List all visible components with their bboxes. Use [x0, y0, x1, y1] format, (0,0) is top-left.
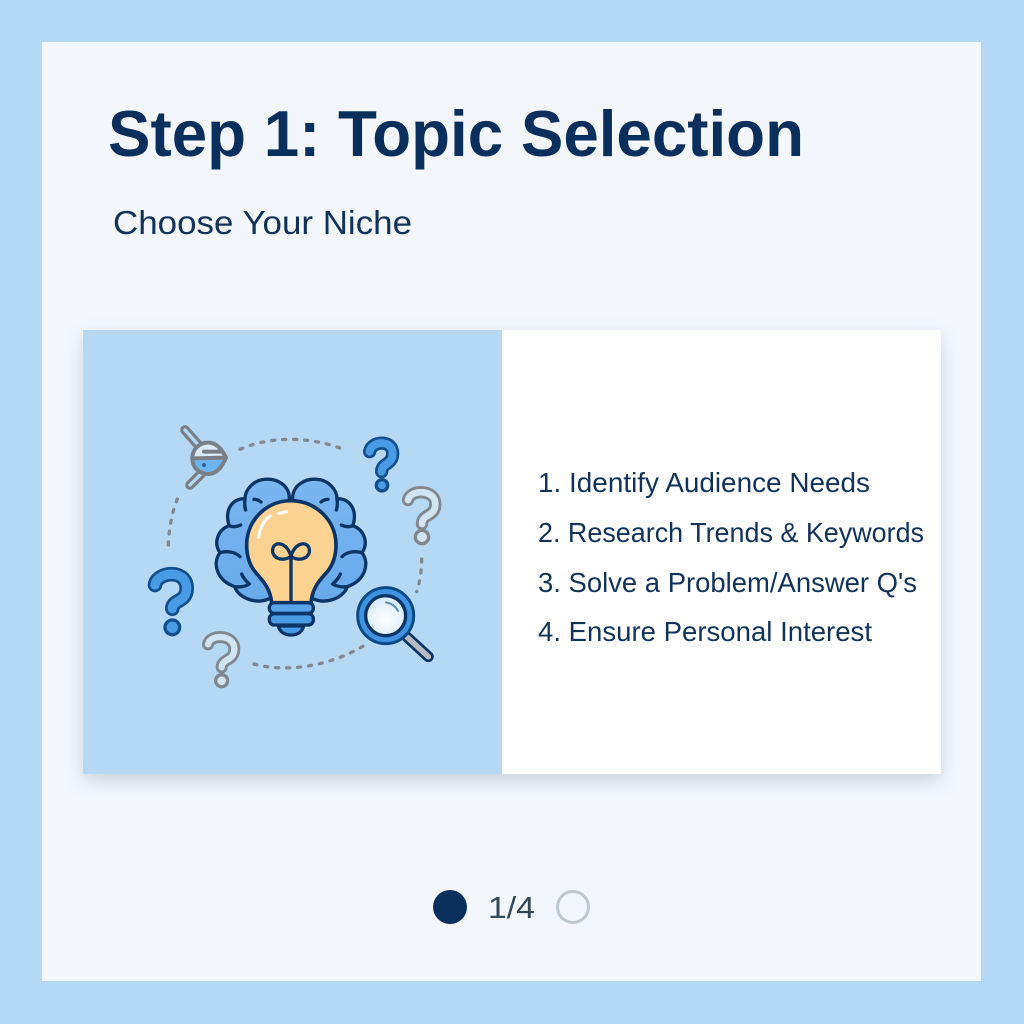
list item 3: 3. Solve a Problem/Answer Q's: [538, 567, 917, 598]
subtitle: Choose Your Niche: [113, 204, 412, 241]
list item 2: 2. Research Trends & Keywords: [538, 517, 924, 548]
icon: flask: [185, 430, 226, 485]
icon: question mark blue left: [155, 574, 187, 635]
list item 4: 4. Ensure Personal Interest: [538, 616, 872, 647]
list item 1: 1. Identify Audience Needs: [538, 467, 870, 498]
icon: light bulb: [247, 501, 336, 635]
panel: content card: [83, 330, 941, 774]
page counter: 1/4: [488, 890, 535, 925]
icon: question mark grey right: [408, 492, 435, 544]
panel: illustration background: [83, 330, 502, 774]
icon: brain: [216, 479, 366, 601]
dashed orbit: [168, 439, 422, 668]
card background: [83, 330, 941, 774]
pagination: [433, 890, 588, 925]
list: steps: [538, 467, 924, 647]
active dot: [433, 890, 467, 924]
illustration: [155, 430, 435, 687]
icon: question mark blue top: [370, 443, 393, 491]
icon: magnifying glass: [358, 588, 428, 657]
inactive dot: [558, 892, 588, 922]
title: Step 1: Topic Selection: [108, 97, 804, 170]
icon: question mark grey bottom: [208, 637, 234, 687]
